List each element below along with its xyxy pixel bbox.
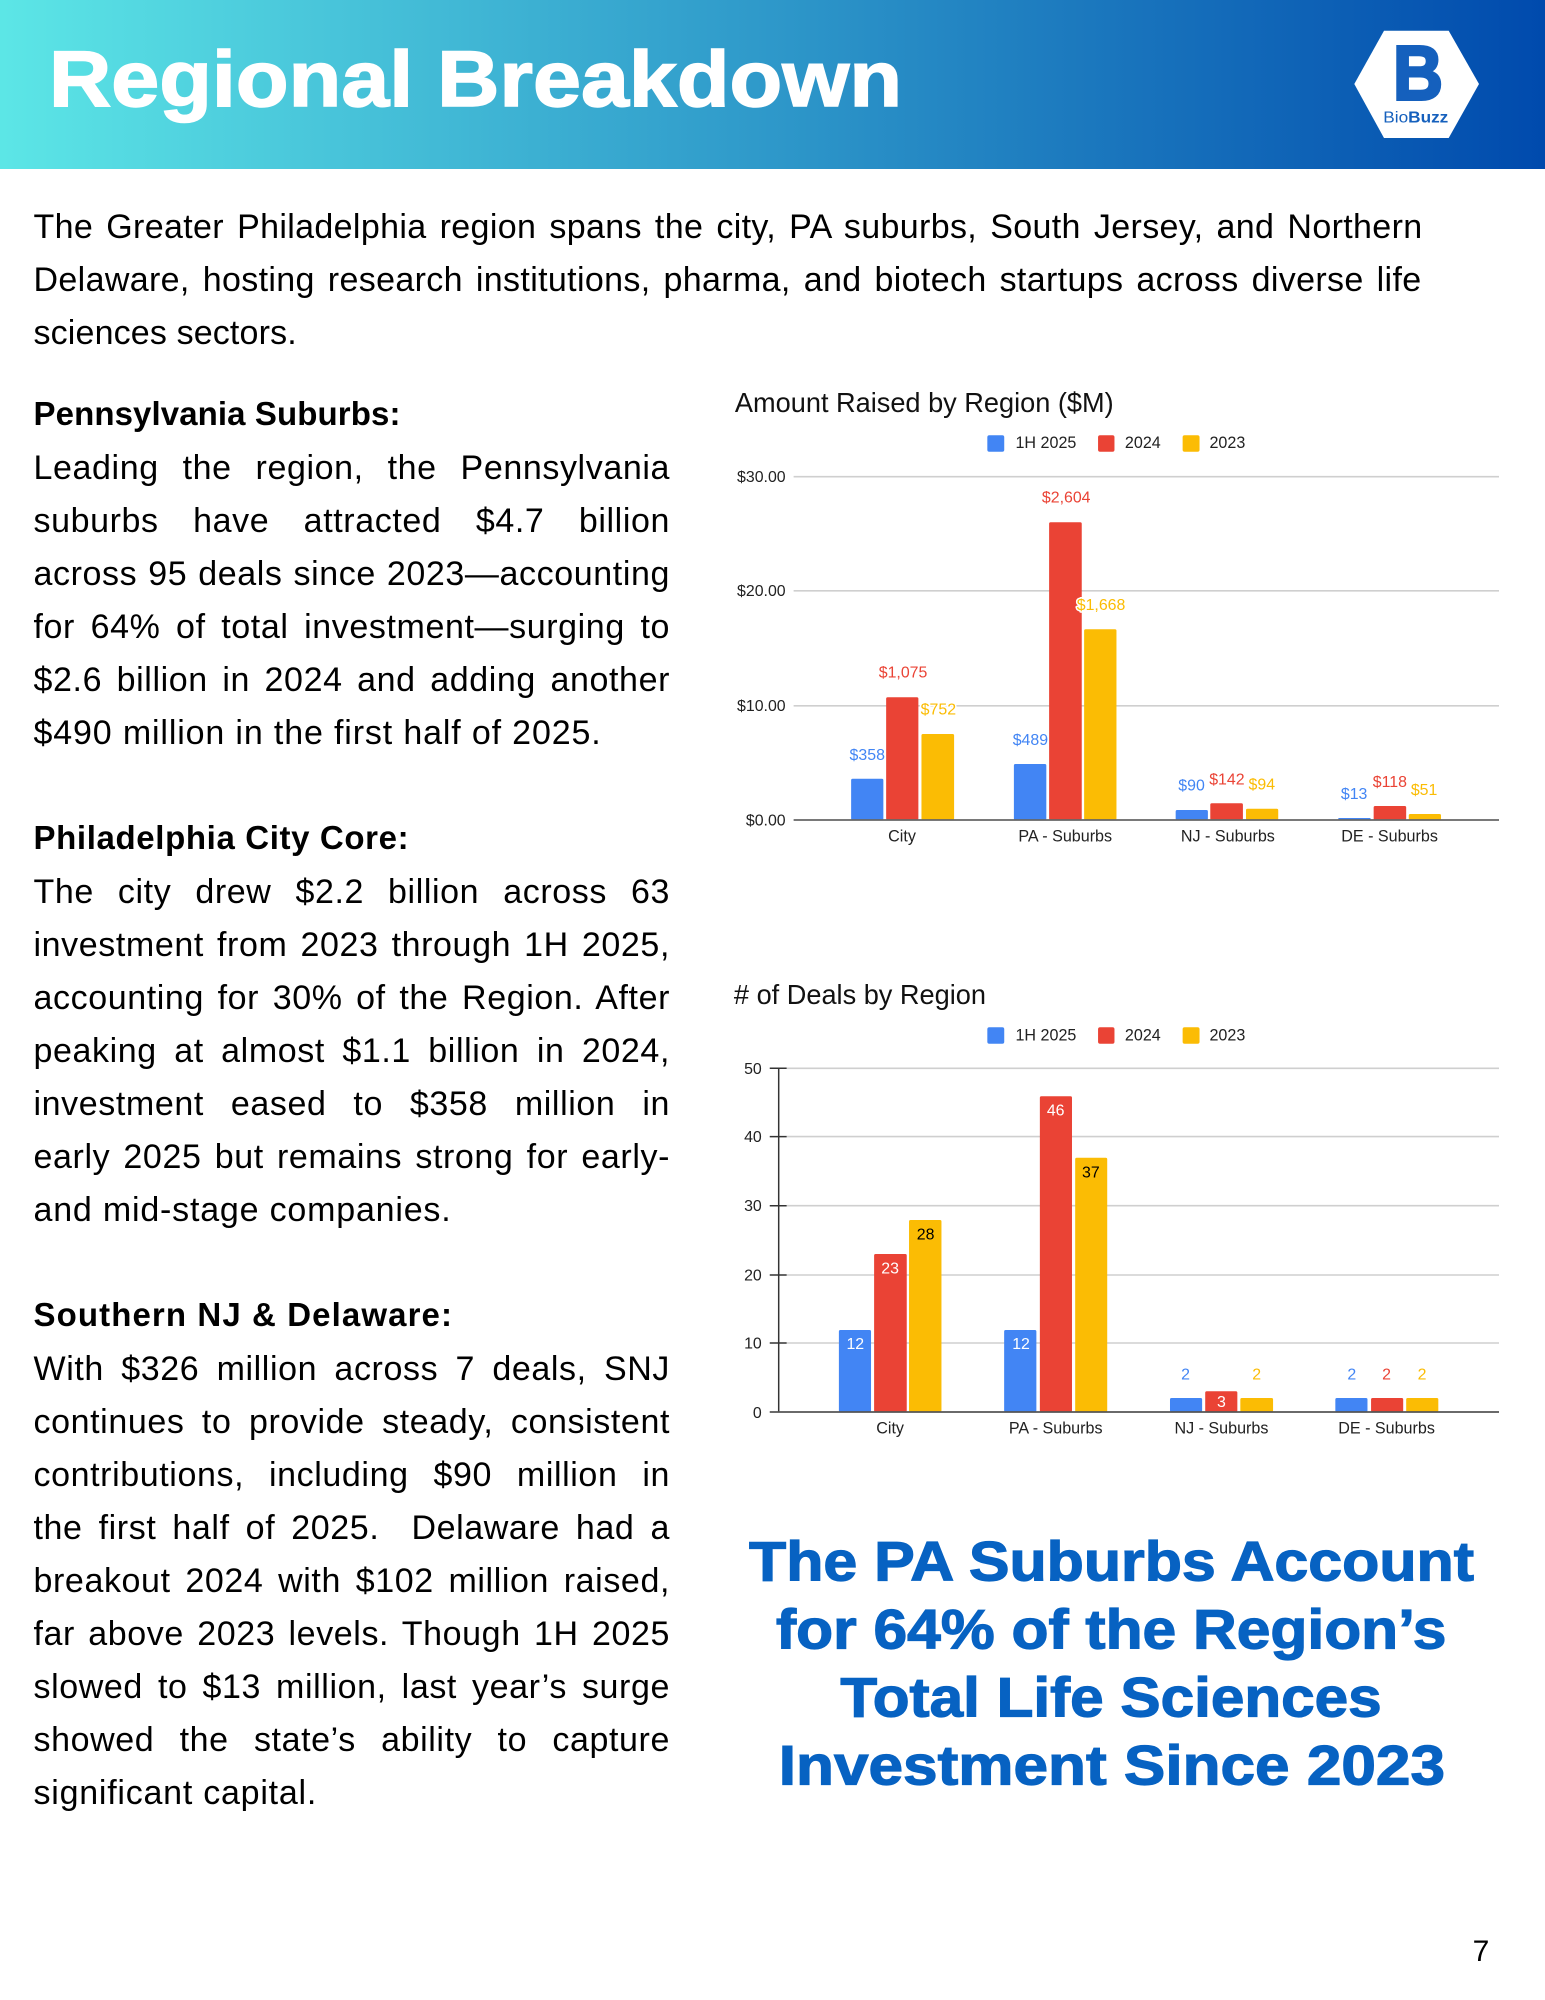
data labels: $489 <box>1013 732 1048 749</box>
y axis labels: $20.00 <box>737 583 786 600</box>
category labels: DE - Suburbs <box>1338 1420 1435 1438</box>
callout: PA suburbs share: Total Life Sciences <box>840 1666 1382 1729</box>
data labels: 12 <box>846 1336 864 1353</box>
text block: Southern NJ and Delaware <box>34 1296 670 1812</box>
logo: BioBuzz hexagon: B <box>1393 30 1443 116</box>
text block: Pennsylvania Suburbs: $2.6 billion in 2024 and adding another <box>34 661 670 699</box>
y axis labels: 50 <box>744 1061 762 1078</box>
y axis with ticks <box>770 1068 787 1412</box>
legend: 2024 <box>1125 434 1161 452</box>
data labels: $142 <box>1209 771 1245 788</box>
page number: 7 <box>1473 1935 1489 1968</box>
text block: Pennsylvania Suburbs: across 95 deals since 2023—accounting <box>34 555 670 593</box>
legend: 1H 2025 <box>1015 1026 1076 1044</box>
legend: 1H 2025 <box>1015 434 1076 452</box>
category labels: NJ - Suburbs <box>1174 1420 1268 1438</box>
text block: Philadelphia City Core <box>34 819 670 1229</box>
text block: Philadelphia City Core: accounting for 30% of the Region. After <box>34 979 670 1017</box>
callout: PA suburbs share <box>749 1530 1474 1797</box>
heading: Pennsylvania Suburbs: Pennsylvania Suburbs: <box>34 395 401 432</box>
data labels: 2 <box>1418 1366 1427 1383</box>
category labels <box>888 828 1438 846</box>
legend: 2023 <box>1209 434 1245 452</box>
text block: Southern NJ and Delaware: significant capital. <box>34 1774 317 1812</box>
callout: PA suburbs share: Investment Since 2023 <box>779 1734 1445 1797</box>
bars: PA Suburbs <box>1004 1096 1107 1412</box>
data labels: $1,075 <box>879 665 928 682</box>
text block: Pennsylvania Suburbs: suburbs have attracted $4.7 billion <box>34 502 670 540</box>
text block: Philadelphia City Core: investment eased to $358 million in <box>34 1085 670 1123</box>
legend: 2023 <box>1209 1026 1245 1044</box>
intro text: Delaware, hosting research institutions, pharma, and biotech startups across diverse life <box>34 261 1422 299</box>
category labels <box>876 1420 1435 1438</box>
callout: PA suburbs share: for 64% of the Region’s <box>776 1598 1446 1661</box>
y axis labels: $30.00 <box>737 469 786 486</box>
y axis labels: 10 <box>744 1335 762 1353</box>
text block: Philadelphia City Core: and mid-stage companies. <box>34 1191 451 1229</box>
data labels: 28 <box>917 1226 935 1243</box>
data labels: 2 <box>1382 1366 1391 1383</box>
data labels: 3 <box>1217 1394 1226 1411</box>
bar chart: amount raised by region <box>735 387 1499 846</box>
text block: Southern NJ and Delaware: continues to provide steady, consistent <box>34 1403 670 1441</box>
bars: City <box>839 1220 941 1412</box>
data labels: 2 <box>1181 1366 1190 1383</box>
text block: Southern NJ and Delaware: the first half of 2025. Delaware had a <box>34 1509 670 1547</box>
header banner <box>0 0 1545 169</box>
data labels: $13 <box>1341 786 1368 803</box>
title: Regional Breakdown <box>49 34 902 123</box>
x axis baseline <box>794 819 1499 821</box>
data labels: 2 <box>1252 1366 1261 1383</box>
y axis labels: 20 <box>744 1267 762 1285</box>
text block: Pennsylvania Suburbs: for 64% of total investment—surging to <box>34 608 670 646</box>
gridlines <box>787 1068 1499 1343</box>
data labels: 12 <box>1012 1336 1030 1353</box>
y axis labels <box>744 1061 762 1422</box>
callout: PA suburbs share: The PA Suburbs Account <box>749 1530 1474 1593</box>
logo: BioBuzz hexagon: BioBuzz <box>1383 110 1449 127</box>
data labels <box>846 1103 1427 1411</box>
text block: Philadelphia City Core: early 2025 but remains strong for early- <box>34 1138 670 1176</box>
text block: Southern NJ and Delaware: contributions, including $90 million in <box>34 1456 670 1494</box>
category labels: PA - Suburbs <box>1009 1420 1103 1438</box>
data labels: 2 <box>1347 1366 1356 1383</box>
x axis baseline <box>770 1411 1499 1413</box>
text block: Philadelphia City Core: The city drew $2.2 billion across 63 <box>34 873 670 911</box>
logo: BioBuzz hexagon <box>1354 30 1479 138</box>
legend <box>987 1026 1245 1044</box>
data labels: $1,668 <box>1077 597 1125 614</box>
category labels: DE - Suburbs <box>1341 828 1438 846</box>
data labels: $752 <box>921 701 956 718</box>
text block: Pennsylvania Suburbs: $490 million in the first half of 2025. <box>34 714 602 752</box>
data labels: $94 <box>1249 776 1275 793</box>
text block: Philadelphia City Core: investment from 2023 through 1H 2025, <box>34 926 670 964</box>
bar chart: number of deals by region <box>734 979 1499 1438</box>
category labels: NJ - Suburbs <box>1181 828 1275 846</box>
text block: Pennsylvania Suburbs <box>34 395 670 752</box>
category labels: PA - Suburbs <box>1018 828 1112 846</box>
text block: Southern NJ and Delaware: With $326 million across 7 deals, SNJ <box>34 1350 670 1388</box>
intro text <box>34 208 1422 352</box>
intro text: sciences sectors. <box>34 314 297 352</box>
gridlines <box>794 477 1499 706</box>
y axis labels <box>737 469 786 830</box>
y axis labels: 40 <box>744 1129 762 1146</box>
text block: Philadelphia City Core: peaking at almost $1.1 billion in 2024, <box>34 1032 670 1070</box>
heading: Philadelphia City Core: Philadelphia City Core: <box>34 819 409 856</box>
chart title: # of Deals by Region <box>734 979 986 1010</box>
bars: NJ Suburbs <box>1176 803 1278 820</box>
text block: Southern NJ and Delaware: far above 2023 levels. Though 1H 2025 <box>34 1615 670 1653</box>
text block: Southern NJ and Delaware: breakout 2024 with $102 million raised, <box>34 1562 670 1600</box>
bars: NJ Suburbs <box>1170 1391 1273 1412</box>
text block: Southern NJ and Delaware: showed the state’s ability to capture <box>34 1721 670 1759</box>
intro text: The Greater Philadelphia region spans the city, PA suburbs, South Jersey, and Northern <box>34 208 1422 246</box>
category labels: City <box>888 828 917 846</box>
text block: Southern NJ and Delaware: slowed to $13 million, last year’s surge <box>34 1668 670 1706</box>
data labels: $118 <box>1373 774 1407 791</box>
data labels: 46 <box>1047 1103 1065 1120</box>
bars: City <box>851 697 954 820</box>
data labels: $90 <box>1178 778 1205 795</box>
chart title: Amount Raised by Region ($M) <box>735 387 1114 418</box>
legend: 2024 <box>1125 1026 1161 1044</box>
y axis labels: $0.00 <box>746 812 786 830</box>
bars: DE Suburbs <box>1338 806 1441 820</box>
data labels <box>850 490 1437 803</box>
y axis labels: $10.00 <box>737 698 786 715</box>
bars: PA Suburbs <box>1014 522 1116 820</box>
category labels: City <box>876 1420 905 1438</box>
heading: Southern NJ and Delaware: Southern NJ & Delaware: <box>34 1296 453 1333</box>
data labels: $51 <box>1411 782 1437 799</box>
data labels: $358 <box>850 747 885 764</box>
data labels: 37 <box>1082 1164 1100 1181</box>
legend <box>987 434 1245 452</box>
bars: DE Suburbs <box>1335 1398 1438 1412</box>
data labels: $2,604 <box>1042 490 1091 507</box>
text block: Pennsylvania Suburbs: Leading the region, the Pennsylvania <box>34 449 670 487</box>
y axis labels: 30 <box>744 1198 762 1215</box>
y axis labels: 0 <box>753 1405 762 1422</box>
data labels: 23 <box>881 1261 899 1278</box>
